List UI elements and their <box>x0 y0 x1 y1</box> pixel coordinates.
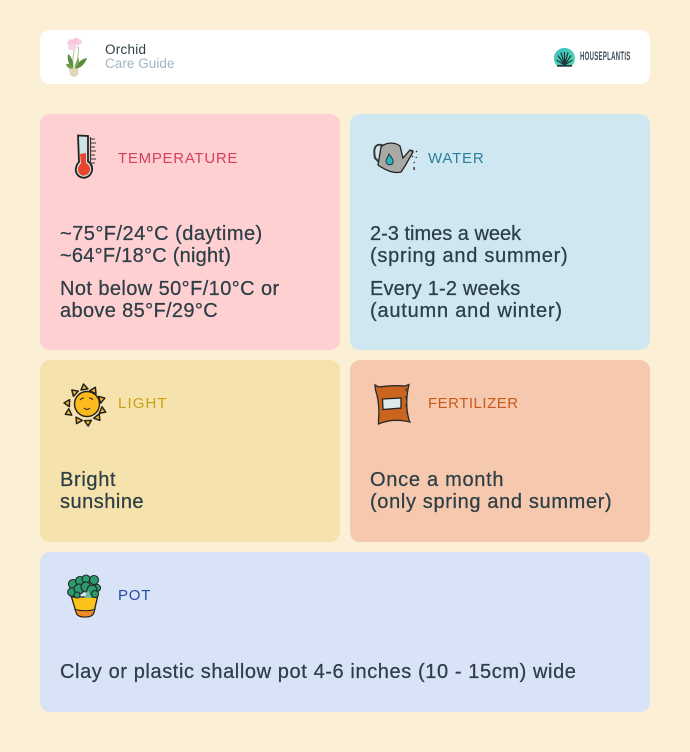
icon: potted plant <box>67 574 101 618</box>
text line: ~75°F/24°C (daytime) <box>60 223 263 245</box>
text line: (only spring and summer) <box>370 491 612 513</box>
heading: fertilizer: FERTILIZER <box>428 395 519 412</box>
logo wordmark: HOUSEPLANTIS <box>580 51 631 63</box>
panel: water <box>350 114 650 350</box>
icon: watering can <box>373 142 418 174</box>
panel: light <box>40 360 340 542</box>
text line: sunshine <box>60 491 144 513</box>
text: water schedule <box>370 223 568 322</box>
text: temperature values <box>60 223 280 322</box>
icon: smiling sun <box>63 383 106 427</box>
icon: fertilizer bag <box>374 384 412 425</box>
text: pot description: Clay or plastic shallow pot 4-6 inches (10 - 15cm) wide <box>60 661 577 683</box>
text line: above 85°F/29°C <box>60 300 218 322</box>
heading: water: WATER <box>428 150 484 167</box>
text: fertilizer schedule <box>370 469 612 513</box>
panel: fertilizer <box>350 360 650 542</box>
subtitle: Care Guide: Care Guide <box>105 56 175 71</box>
panel: temperature <box>40 114 340 350</box>
heading: light: LIGHT <box>118 395 168 412</box>
icon: logo mark <box>554 48 575 67</box>
text line: ~64°F/18°C (night) <box>60 245 231 267</box>
panel: pot <box>40 552 650 712</box>
text line: (autumn and winter) <box>370 300 563 322</box>
icon: thermometer <box>74 134 96 179</box>
heading: pot: POT <box>118 587 151 604</box>
header bar <box>40 30 650 84</box>
text line: Bright <box>60 469 116 491</box>
text line: 2-3 times a week <box>370 223 521 245</box>
text line: (spring and summer) <box>370 245 568 267</box>
text line: Every 1-2 weeks <box>370 278 520 300</box>
icon: orchid plant <box>66 38 87 77</box>
text line: Once a month <box>370 469 504 491</box>
text: light requirement <box>60 469 144 513</box>
text line: Not below 50°F/10°C or <box>60 278 280 300</box>
title: Orchid: Orchid <box>105 42 146 57</box>
logo: Houseplantis <box>554 48 631 67</box>
heading: temperature: TEMPERATURE <box>118 150 238 167</box>
